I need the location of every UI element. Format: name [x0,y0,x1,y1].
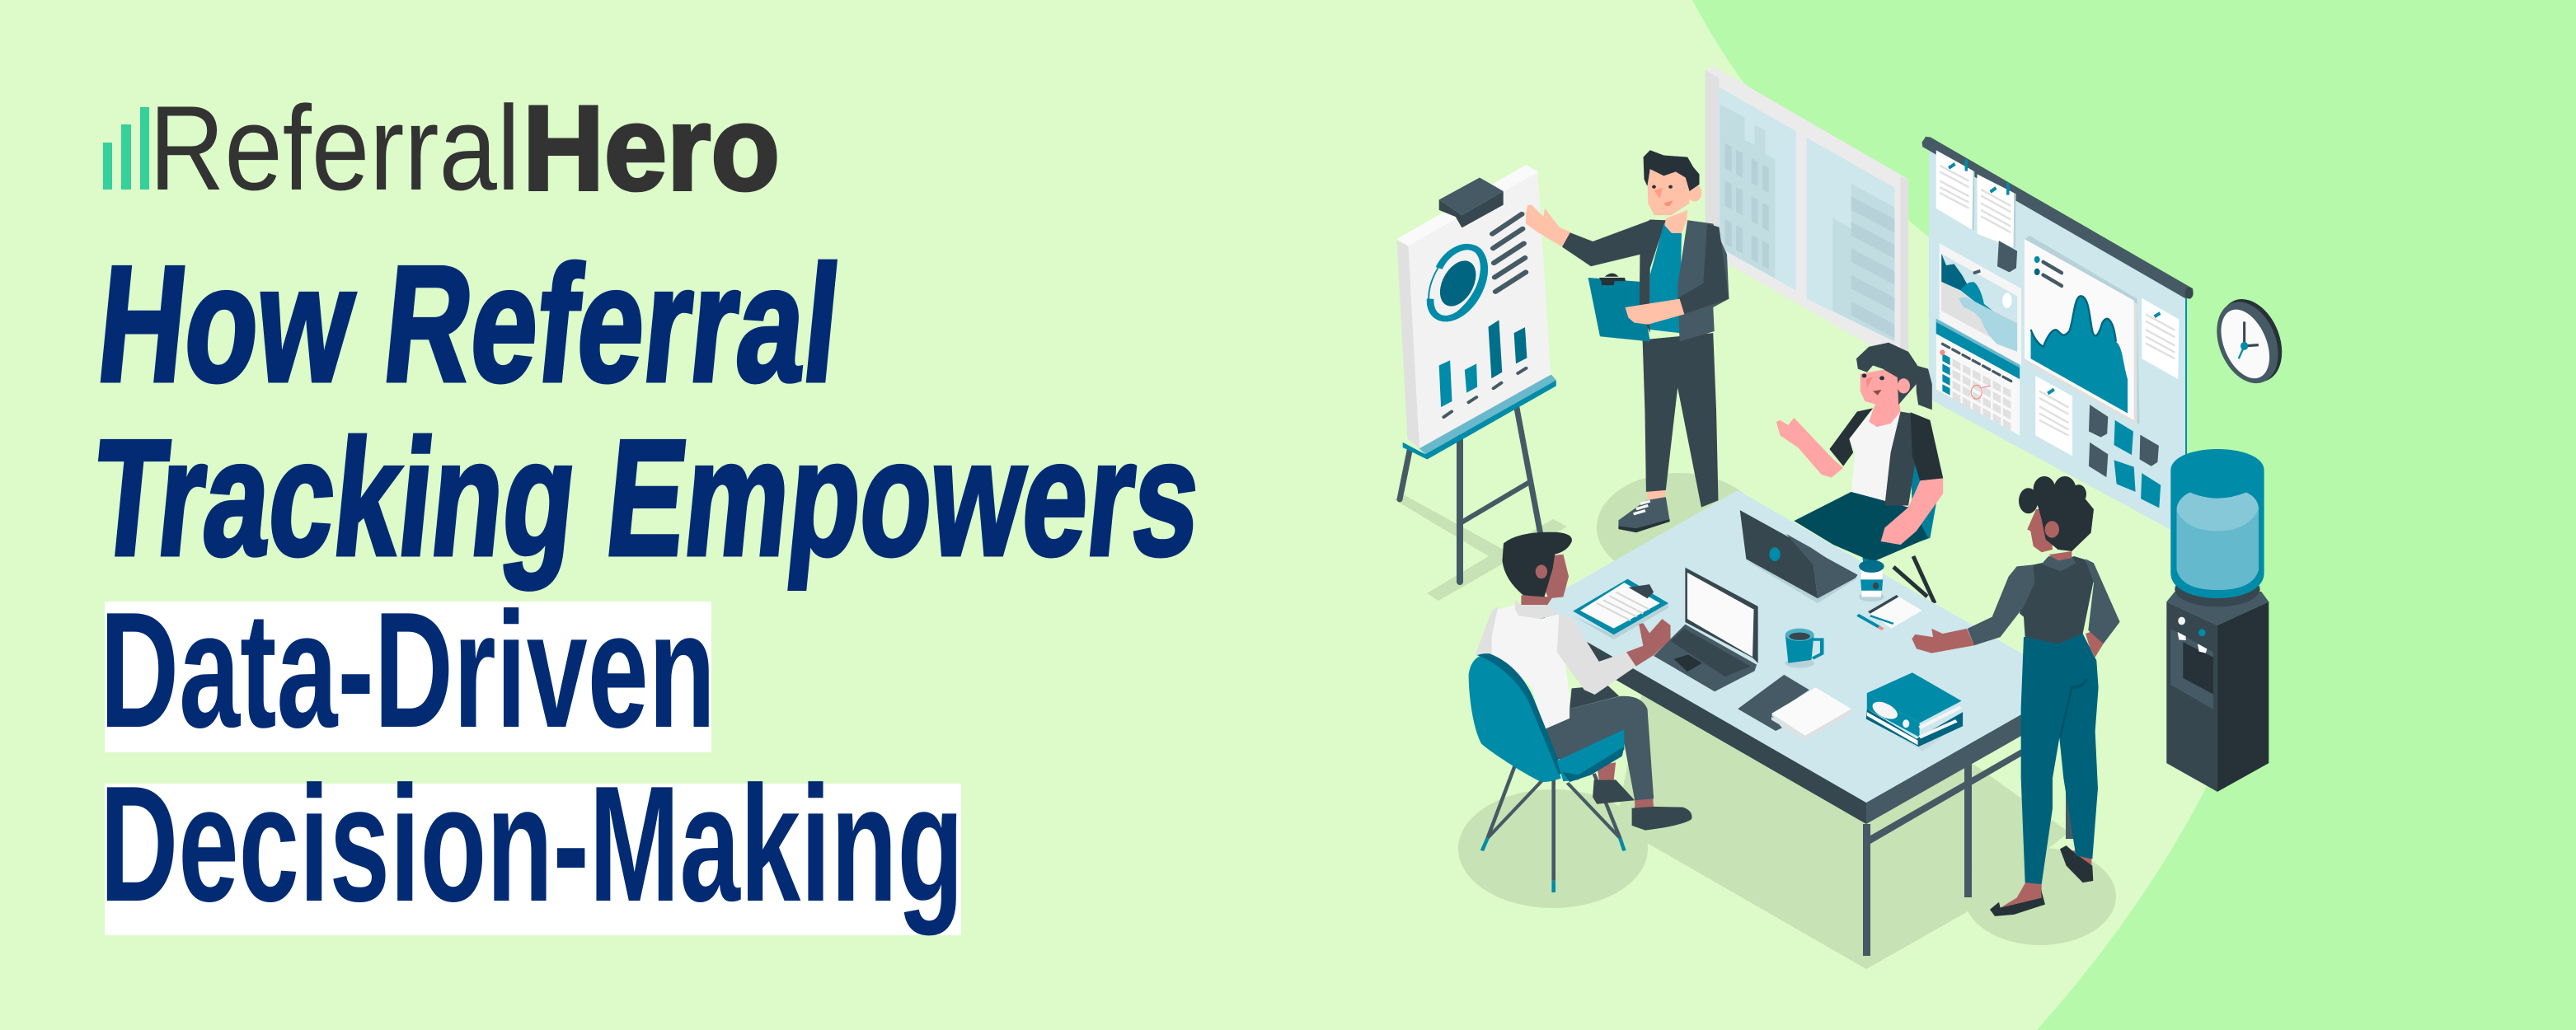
folder and notebook [1738,675,1851,740]
title: How Referral Tracking Empowers [86,232,1208,590]
floor shadows [1394,473,2116,969]
logo: ReferralHero [103,81,780,215]
title: How Referral Tracking Empowers: Tracking Empowers [86,406,1208,590]
coffee takeaway cup [1859,560,1884,602]
subtitle: Data-Driven highlighted: Data-Driven [100,578,716,762]
standing woman [1912,476,2120,916]
binders [1866,672,1965,751]
flipchart board [1397,165,1556,460]
notepad and pen [1858,596,1922,630]
wall board with charts and notes [1922,137,2194,538]
chair legs [1482,765,1624,892]
coffee mug [1785,629,1822,667]
note papers [1936,150,2179,456]
window [1706,66,1908,357]
logo wordmark [149,81,780,215]
chair seat and back [1469,653,1624,782]
curly hair [2019,476,2094,551]
background: green blob on the right [1692,0,2576,1030]
icon: logo bars [103,107,149,190]
area chart panel [2025,236,2140,424]
meeting table [1530,490,2075,956]
title: How Referral Tracking Empowers: How Referral [91,232,847,416]
seated man on chair [1469,532,1692,892]
table legs [1863,717,2073,956]
desk items [1573,510,1965,751]
subtitle: Decision-Making highlighted: Decision-Making [100,752,964,936]
illustration: office meeting scene [1394,66,2294,969]
front laptop [1654,568,1758,691]
donut chart [1417,239,1499,328]
wall clock [2205,288,2294,395]
sticky notes [1997,241,2161,508]
logo wordmark: Referral [149,81,520,215]
subtitle: Decision-Making highlighted [100,752,964,936]
water cooler [2166,449,2269,792]
picture panel [1940,243,2021,366]
subtitle: Data-Driven highlighted [100,578,716,762]
calendar [1936,319,2020,435]
bar chart [1439,320,1527,417]
logo wordmark: Hero [523,81,780,215]
flipchart easel [1397,165,1556,582]
seated woman on chair [1776,343,1943,603]
back laptop [1740,510,1858,603]
easel legs [1400,408,1542,582]
clipboard [1573,579,1668,639]
standing man presenting [1526,150,1729,532]
